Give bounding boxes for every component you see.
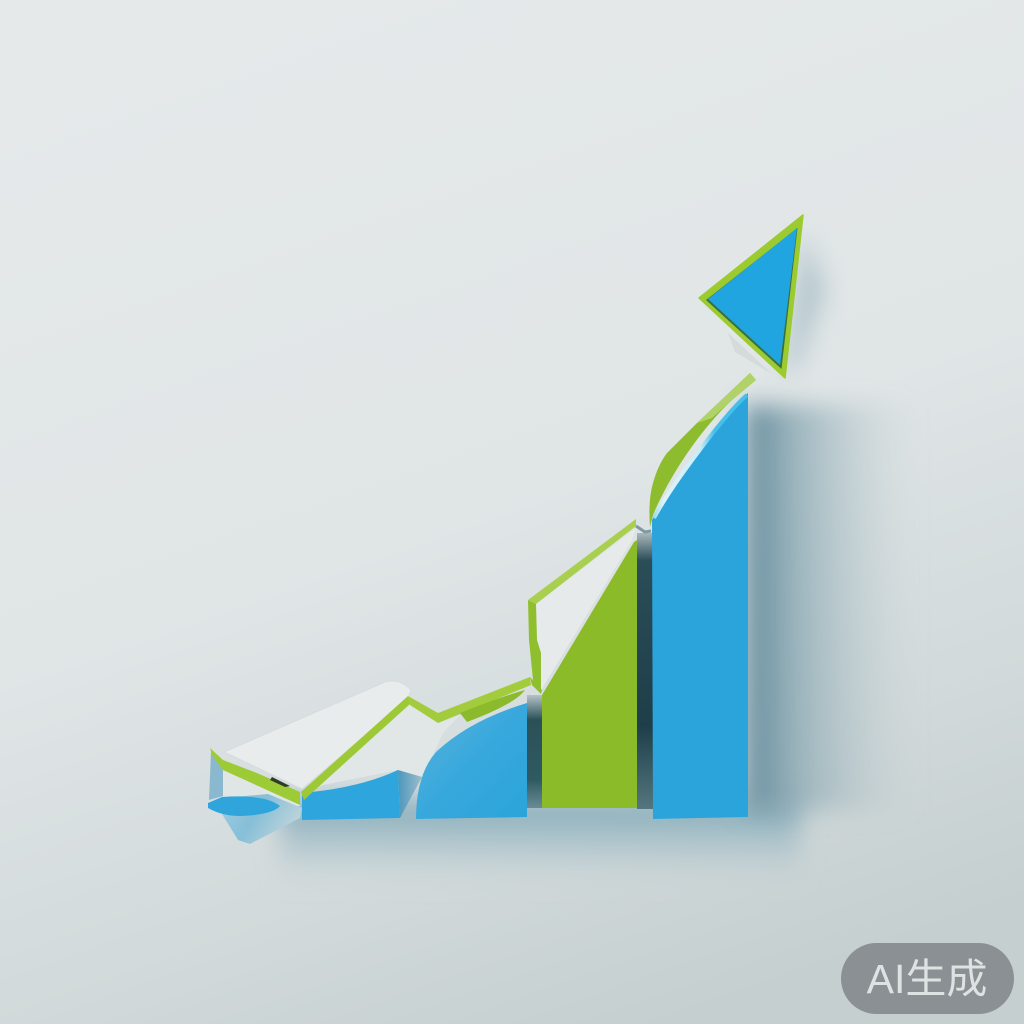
soft shadows [280, 232, 915, 885]
white panel behind line [224, 681, 411, 789]
green trend line [210, 373, 756, 805]
green bar [536, 528, 637, 808]
badge: AI generated: AI生成 [867, 956, 987, 1002]
white panel between lines [302, 705, 460, 793]
blue bar 2 [302, 770, 422, 820]
blue bar 1: funnel [208, 752, 302, 844]
arrowhead: triangle [699, 215, 803, 378]
tall blue bar [652, 393, 748, 819]
badge: AI generated [841, 943, 1014, 1014]
blue bar 3 [416, 703, 527, 819]
